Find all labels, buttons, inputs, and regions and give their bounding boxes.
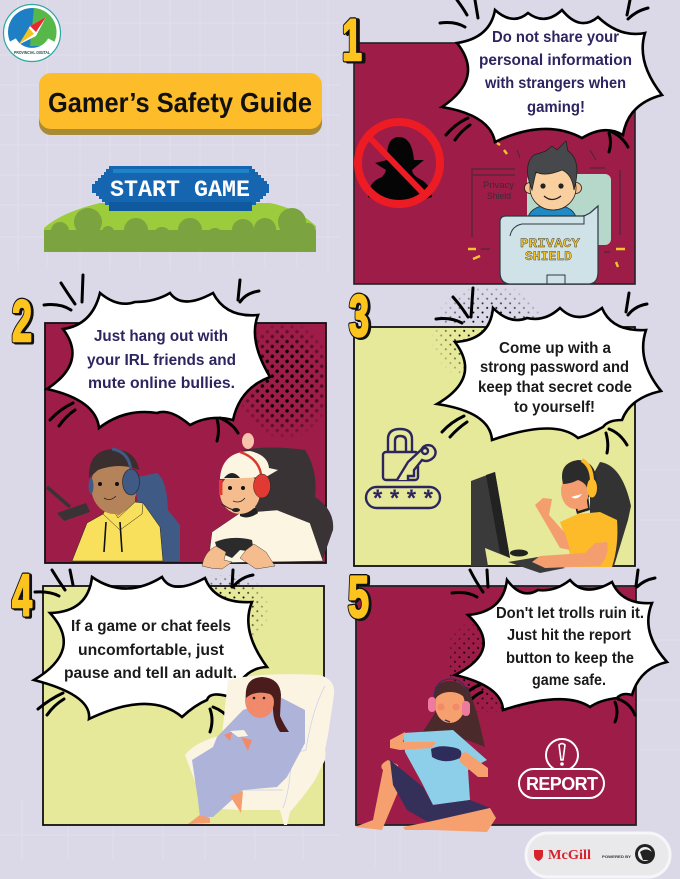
number 2: 2 xyxy=(12,289,32,354)
speech bubble 5 xyxy=(452,570,667,722)
bubble 5 text: button to keep the xyxy=(506,650,634,667)
powered by: POWERED BY xyxy=(602,855,632,859)
number 3 xyxy=(349,284,371,350)
speech bubble 2 xyxy=(44,275,270,441)
arms xyxy=(390,732,436,750)
bubble 5 text xyxy=(496,605,644,689)
number 4 xyxy=(12,563,34,629)
bubble 2 text: mute online bullies. xyxy=(88,375,235,392)
speech bubble 3 xyxy=(436,288,661,453)
number 1: 1 xyxy=(342,8,362,73)
halftone dots xyxy=(241,324,325,438)
bubble 3 text: strong password and xyxy=(480,359,629,376)
girl head and braid xyxy=(245,682,275,718)
bubble 1 text: with strangers when xyxy=(484,75,626,92)
password field xyxy=(366,487,440,508)
logo: compass badge xyxy=(4,4,60,62)
bubble 5 text: game safe. xyxy=(532,672,606,689)
bubble 3 text xyxy=(478,340,632,416)
bubble 3 text: keep that secret code xyxy=(478,379,632,396)
no-spy sign icon xyxy=(358,122,440,204)
speech bubble 1 xyxy=(440,0,662,152)
bent leg xyxy=(355,760,400,830)
hill and bushes xyxy=(44,203,316,252)
number 3: 3 xyxy=(351,285,371,350)
monitor xyxy=(471,472,510,566)
gamer at computer xyxy=(471,460,631,573)
report label: REPORT xyxy=(526,774,598,794)
number 1: 1 xyxy=(345,9,365,74)
skirt xyxy=(390,760,490,822)
shield sign xyxy=(500,206,598,284)
halftone dots xyxy=(450,624,534,712)
start game graphic xyxy=(44,166,316,252)
number 5: 5 xyxy=(350,566,371,631)
number 5: 5 xyxy=(348,565,369,630)
shirt xyxy=(403,730,487,805)
bubble 4 text: uncomfortable, just xyxy=(78,642,224,659)
number 3: 3 xyxy=(349,284,369,349)
woman with controller illustration xyxy=(355,679,496,832)
right boy with controller xyxy=(202,433,333,569)
bubble 1 text: Do not share your xyxy=(492,29,619,46)
bubble 3 text: Come up with a xyxy=(499,340,611,357)
title banner xyxy=(39,73,322,135)
McGill shield icon xyxy=(534,850,543,861)
report icon xyxy=(519,739,604,798)
bubble 5 text: Don't let trolls ruin it. xyxy=(496,605,644,622)
burst marks xyxy=(35,570,253,732)
bubble 2 text: Just hang out with xyxy=(94,328,228,345)
shield label: PRIVACY xyxy=(520,236,580,251)
head xyxy=(561,473,589,509)
panel 3: strong password xyxy=(354,288,635,573)
left boy with microphone xyxy=(47,449,180,561)
speech bubble 4 xyxy=(34,570,267,732)
gaming chair xyxy=(590,462,631,566)
boy xyxy=(524,141,582,217)
girl body xyxy=(192,697,305,817)
number 4: 4 xyxy=(12,563,32,628)
privacy shield boy illustration xyxy=(468,141,625,284)
number 5: 5 xyxy=(348,565,369,630)
controller xyxy=(431,746,461,761)
shirt xyxy=(560,512,617,567)
hair back xyxy=(422,687,485,747)
armchair xyxy=(185,674,334,825)
halftone dots xyxy=(206,575,268,636)
burst marks xyxy=(452,570,655,722)
bubble 3 text: to yourself! xyxy=(514,399,595,416)
bubble 2 text: your IRL friends and xyxy=(87,352,236,369)
start game pixel button xyxy=(92,166,269,211)
bubble 2 text xyxy=(87,328,236,392)
bubble 5 text: Just hit the report xyxy=(507,627,631,644)
bubble 4 text xyxy=(64,618,237,682)
sponsor badge xyxy=(526,833,670,877)
lock and key icon xyxy=(366,429,440,512)
number 2: 2 xyxy=(12,289,32,354)
number 4: 4 xyxy=(12,563,32,628)
number 1: 1 xyxy=(342,8,362,73)
panel 1: personal information xyxy=(354,43,635,284)
girl in armchair illustration xyxy=(185,674,334,825)
head xyxy=(435,687,465,723)
burst marks xyxy=(440,0,648,152)
button label: START GAME xyxy=(110,177,250,203)
panel 2: hang out with friends xyxy=(45,323,333,569)
panel 4: tell an adult xyxy=(43,575,324,825)
logo caption: PROVINCIAL DIGITAL xyxy=(14,50,50,55)
crossed leg xyxy=(403,808,496,832)
password asterisks: **** xyxy=(373,485,434,512)
burst marks xyxy=(436,288,647,453)
panel 5: report trolls xyxy=(356,586,636,825)
lower arm xyxy=(532,542,608,568)
small sign text: Privacy xyxy=(483,180,514,191)
bubble 1 text: gaming! xyxy=(527,99,585,116)
bubble 1 text: personal information xyxy=(479,52,632,69)
bubble 4 text: If a game or chat feels xyxy=(71,618,231,635)
partner round logo xyxy=(635,844,655,864)
privacy shield boy illustration: Shield xyxy=(487,191,511,202)
number 2 xyxy=(12,289,34,355)
bubble 1 text xyxy=(479,29,632,116)
shield sign: SHIELD xyxy=(525,249,572,264)
number 3: 3 xyxy=(349,284,369,349)
number 4: 4 xyxy=(14,564,34,629)
raised arm xyxy=(535,498,570,550)
halftone dots xyxy=(432,330,482,374)
bubble 4 text: pause and tell an adult. xyxy=(64,665,237,682)
burst marks xyxy=(44,275,259,441)
title text: Gamer’s Safety Guide xyxy=(48,87,312,118)
number 2: 2 xyxy=(14,290,34,355)
McGill wordmark: McGill xyxy=(548,847,591,862)
